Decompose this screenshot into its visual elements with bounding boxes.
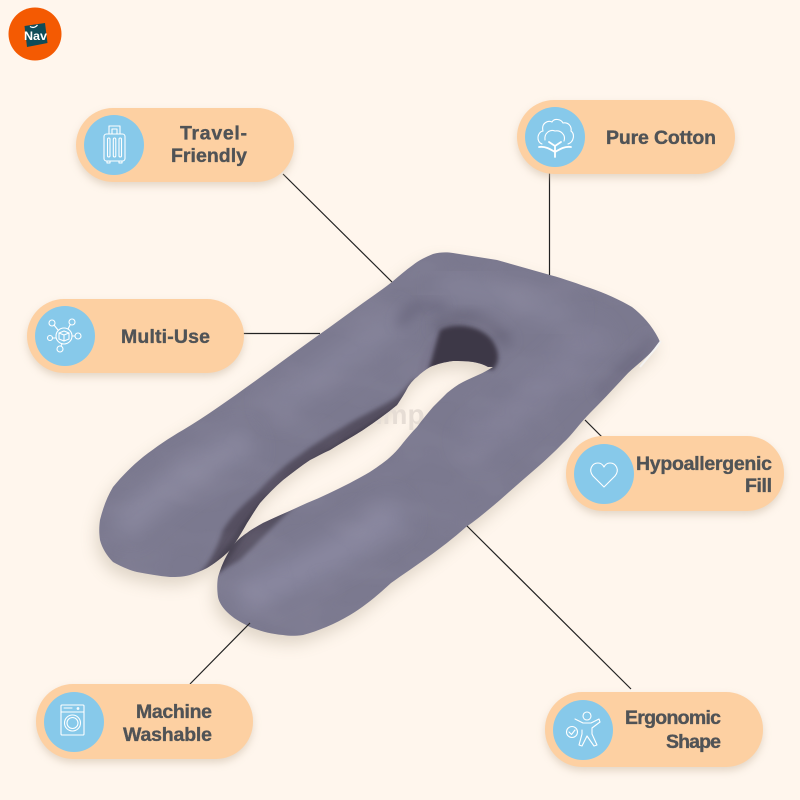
pillow shading: folds and highlights [120,285,655,600]
label text: Friendly [171,145,247,167]
icon: cotton boll [538,119,573,157]
pillow seam: white tag [640,341,661,367]
callout: Machine Washable [36,684,253,763]
label text: Machine [136,701,212,723]
connector lines [190,173,631,689]
icon: body with check mark [566,712,600,746]
icon: box with network nodes [48,319,81,352]
icon: washing machine [61,705,84,735]
pillow cast shadow [96,260,657,644]
label text: Travel- [180,122,247,144]
label text [636,453,772,497]
callout: Ergonomic Shape [545,692,763,771]
label text [123,701,212,746]
icon: heart [591,463,617,487]
label text: Ergonomic [625,707,721,729]
logo: Nav badge: Nav [24,29,47,43]
icon: suitcase [104,126,125,163]
label text: Hypoallergenic [636,453,772,475]
logo: Nav badge [8,8,62,60]
U-shaped pregnancy pillow [90,245,670,645]
label text: Fill [745,475,772,497]
label text: Pure Cotton [606,127,716,149]
callout: Pure Cotton [517,100,735,178]
callout: Multi-Use [27,299,244,377]
callout: Travel-Friendly [76,108,294,186]
label text: Washable [123,724,212,746]
label text: Multi-Use [121,326,210,348]
callout: Hypoallergenic Fill [566,436,784,515]
watermark behind pillow: nmp [365,399,425,430]
label text [171,122,247,167]
pillow velvet texture [236,534,261,546]
label text: Shape [666,731,721,753]
label text [625,707,721,753]
pillow inner recess [428,326,498,372]
